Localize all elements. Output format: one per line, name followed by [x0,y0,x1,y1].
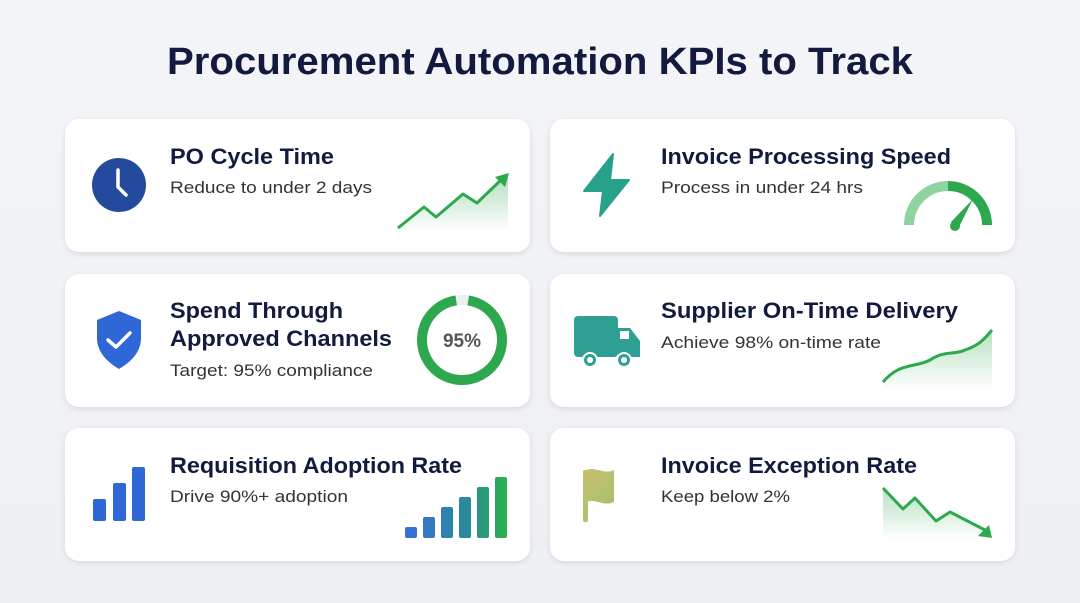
chart: uptrend [398,173,509,232]
text: Achieve 98% on-time rate [661,333,881,352]
title: Procurement Automation KPIs to Track [167,41,914,83]
heading: Supplier On-Time Delivery [661,298,959,323]
icon: truck [574,316,640,367]
icon: lightning [584,154,629,216]
chart: growing bars [405,477,507,538]
heading line 2: Approved Channels [170,326,392,351]
panel: supplier on-time delivery [550,274,1015,407]
heading: PO Cycle Time: PO Cycle Time [170,144,334,169]
text: Target: 95% compliance [170,361,373,380]
heading: Invoice Exception Rate [661,453,917,478]
icon: bar chart [93,467,145,521]
panel: PO cycle time [65,119,530,252]
heading: Spend Through [170,298,343,323]
text: Keep below 2% [661,487,790,506]
icon: shield [97,311,141,369]
heading: Requisition Adoption Rate [170,453,462,478]
panel: requisition adoption rate [65,428,530,561]
chart: downtrend [883,488,992,540]
text: reduce: Reduce to under 2 days [170,178,372,197]
icon: clock [92,158,146,212]
chart: donut 95% [416,294,508,386]
icon: flag [583,469,614,522]
panel: spend through approved channels [65,274,530,407]
chart: curve [883,330,992,390]
panel: invoice processing speed [550,119,1015,252]
text: Process in under 24 hrs [661,178,863,197]
panel: invoice exception rate [550,428,1015,561]
chart: donut 95%: 95% [443,331,481,352]
heading: Invoice Processing Speed [661,144,951,169]
text: Drive 90%+ adoption [170,487,348,506]
chart: gauge [909,186,987,231]
